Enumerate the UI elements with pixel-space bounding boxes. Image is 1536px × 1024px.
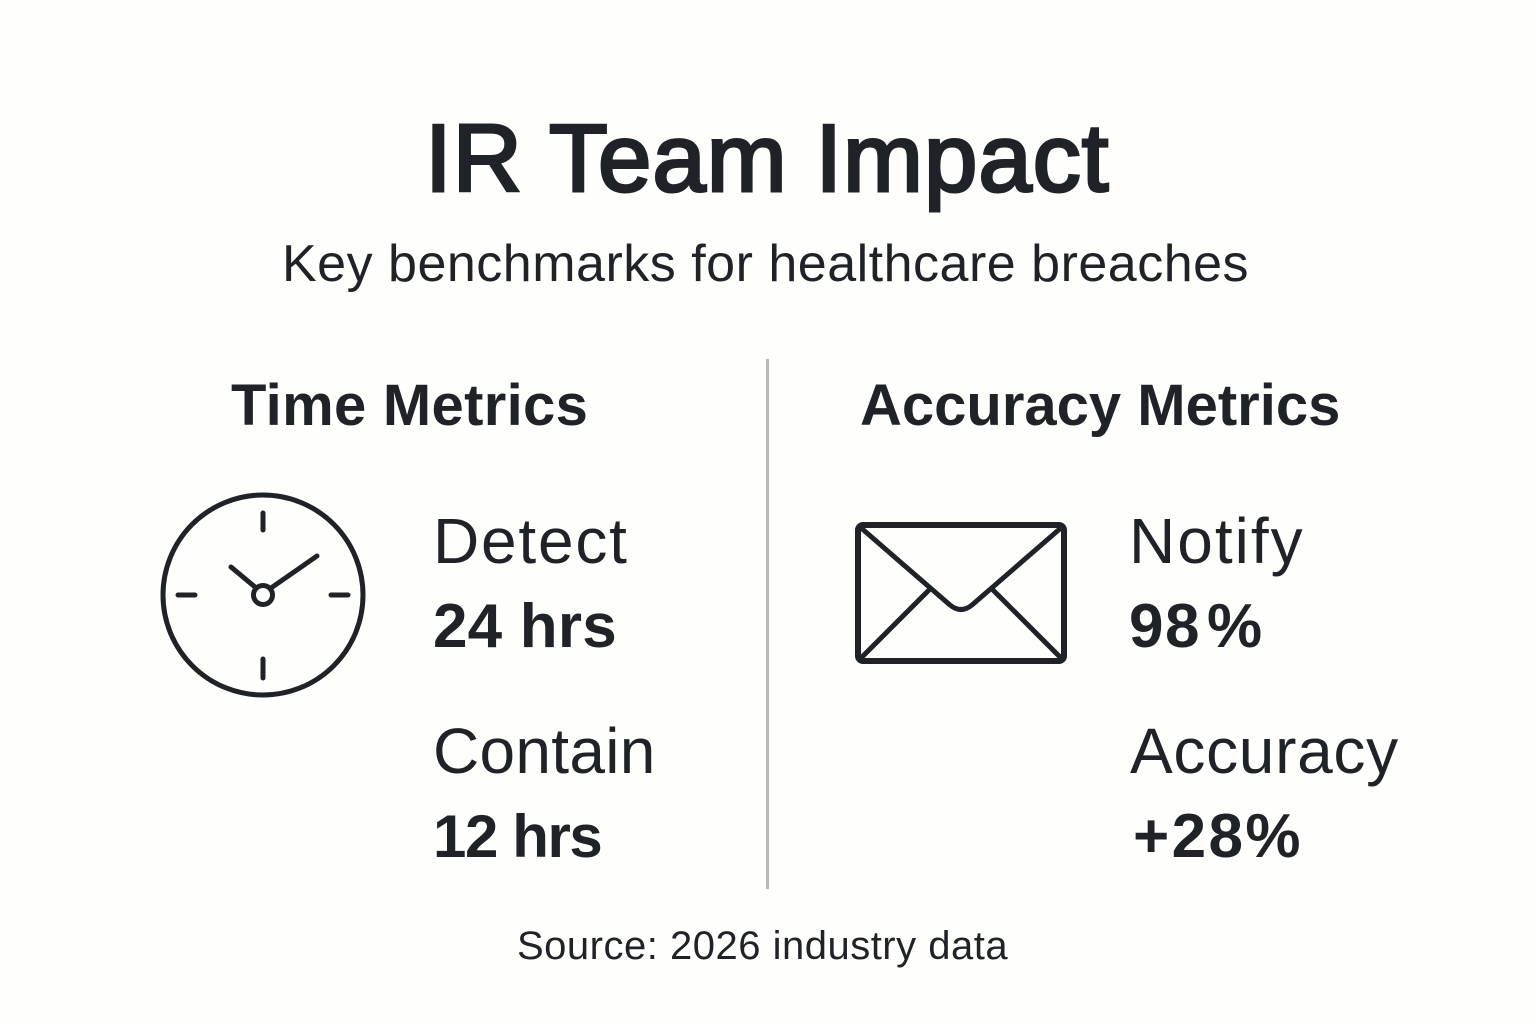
panel: accuracy metrics	[855, 373, 1399, 871]
value: 98%: 98%	[1129, 592, 1264, 661]
value: 24 hrs: 24 hrs	[433, 592, 617, 661]
heading: accuracy metrics: Accuracy Metrics	[860, 373, 1340, 438]
title: IR Team Impact	[425, 105, 1109, 212]
label: accuracy: Accuracy	[1130, 715, 1399, 787]
metric: accuracy	[1130, 715, 1399, 871]
subtitle: Key benchmarks for healthcare breaches	[282, 235, 1249, 293]
value: 12 hrs: 12 hrs	[433, 803, 601, 870]
metric: detect	[433, 505, 629, 661]
metric: contain	[433, 715, 656, 870]
metric: notify	[1129, 505, 1305, 661]
value: +28%: +28%	[1133, 802, 1303, 871]
heading: time metrics: Time Metrics	[231, 373, 588, 438]
source note: Source: 2026 industry data	[517, 924, 1008, 968]
icon: clock	[160, 492, 366, 698]
panel: time metrics	[160, 373, 656, 870]
label: detect: Detect	[433, 505, 629, 577]
icon: envelope	[855, 522, 1067, 664]
label: notify: Notify	[1129, 505, 1305, 577]
vertical divider	[766, 359, 769, 889]
label: contain: Contain	[433, 715, 656, 787]
